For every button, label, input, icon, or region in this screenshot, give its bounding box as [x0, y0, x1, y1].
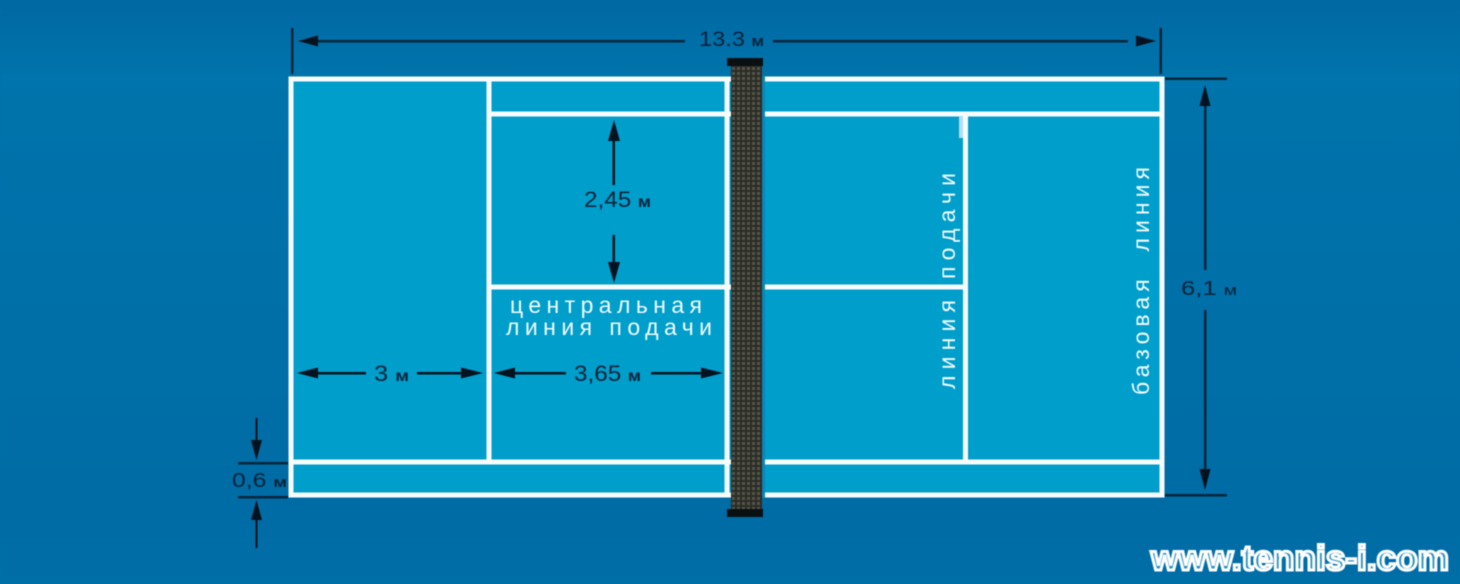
label: baseline vertical: базовая линия	[1128, 167, 1154, 395]
dimension: court length 13.3 m: 13.3 м	[699, 28, 764, 51]
label: service line vertical: подачи	[934, 173, 960, 279]
dimension: court width 6.1 m: 6,1 м	[1181, 278, 1237, 300]
dimension: court width 6.1 m	[1165, 78, 1237, 496]
label: service line vertical	[934, 173, 960, 389]
dimension: court length 13.3 m	[291, 28, 1162, 74]
label: service line vertical: линия	[934, 300, 960, 389]
dimension: service box depth 2.45 m	[584, 120, 651, 283]
dimension: 3.65 m	[494, 361, 723, 386]
dimension: 0.6 m: 0,6 м	[232, 470, 287, 492]
dimension: 3 m	[297, 361, 483, 386]
label: center service line: центральная	[510, 292, 702, 318]
label: center service line	[506, 292, 712, 340]
net	[727, 58, 763, 517]
dimension: service box depth 2.45 m: 2,45 м	[584, 187, 651, 212]
label: center service line: линия подачи	[506, 314, 712, 340]
dimension: 3.65 m: 3,65 м	[574, 361, 641, 386]
dimension: 0.6 m	[232, 418, 288, 548]
court	[291, 76, 1162, 498]
watermark: www.tennis-i.com	[1150, 539, 1449, 578]
dimension: 3 m: 3 м	[374, 361, 409, 386]
